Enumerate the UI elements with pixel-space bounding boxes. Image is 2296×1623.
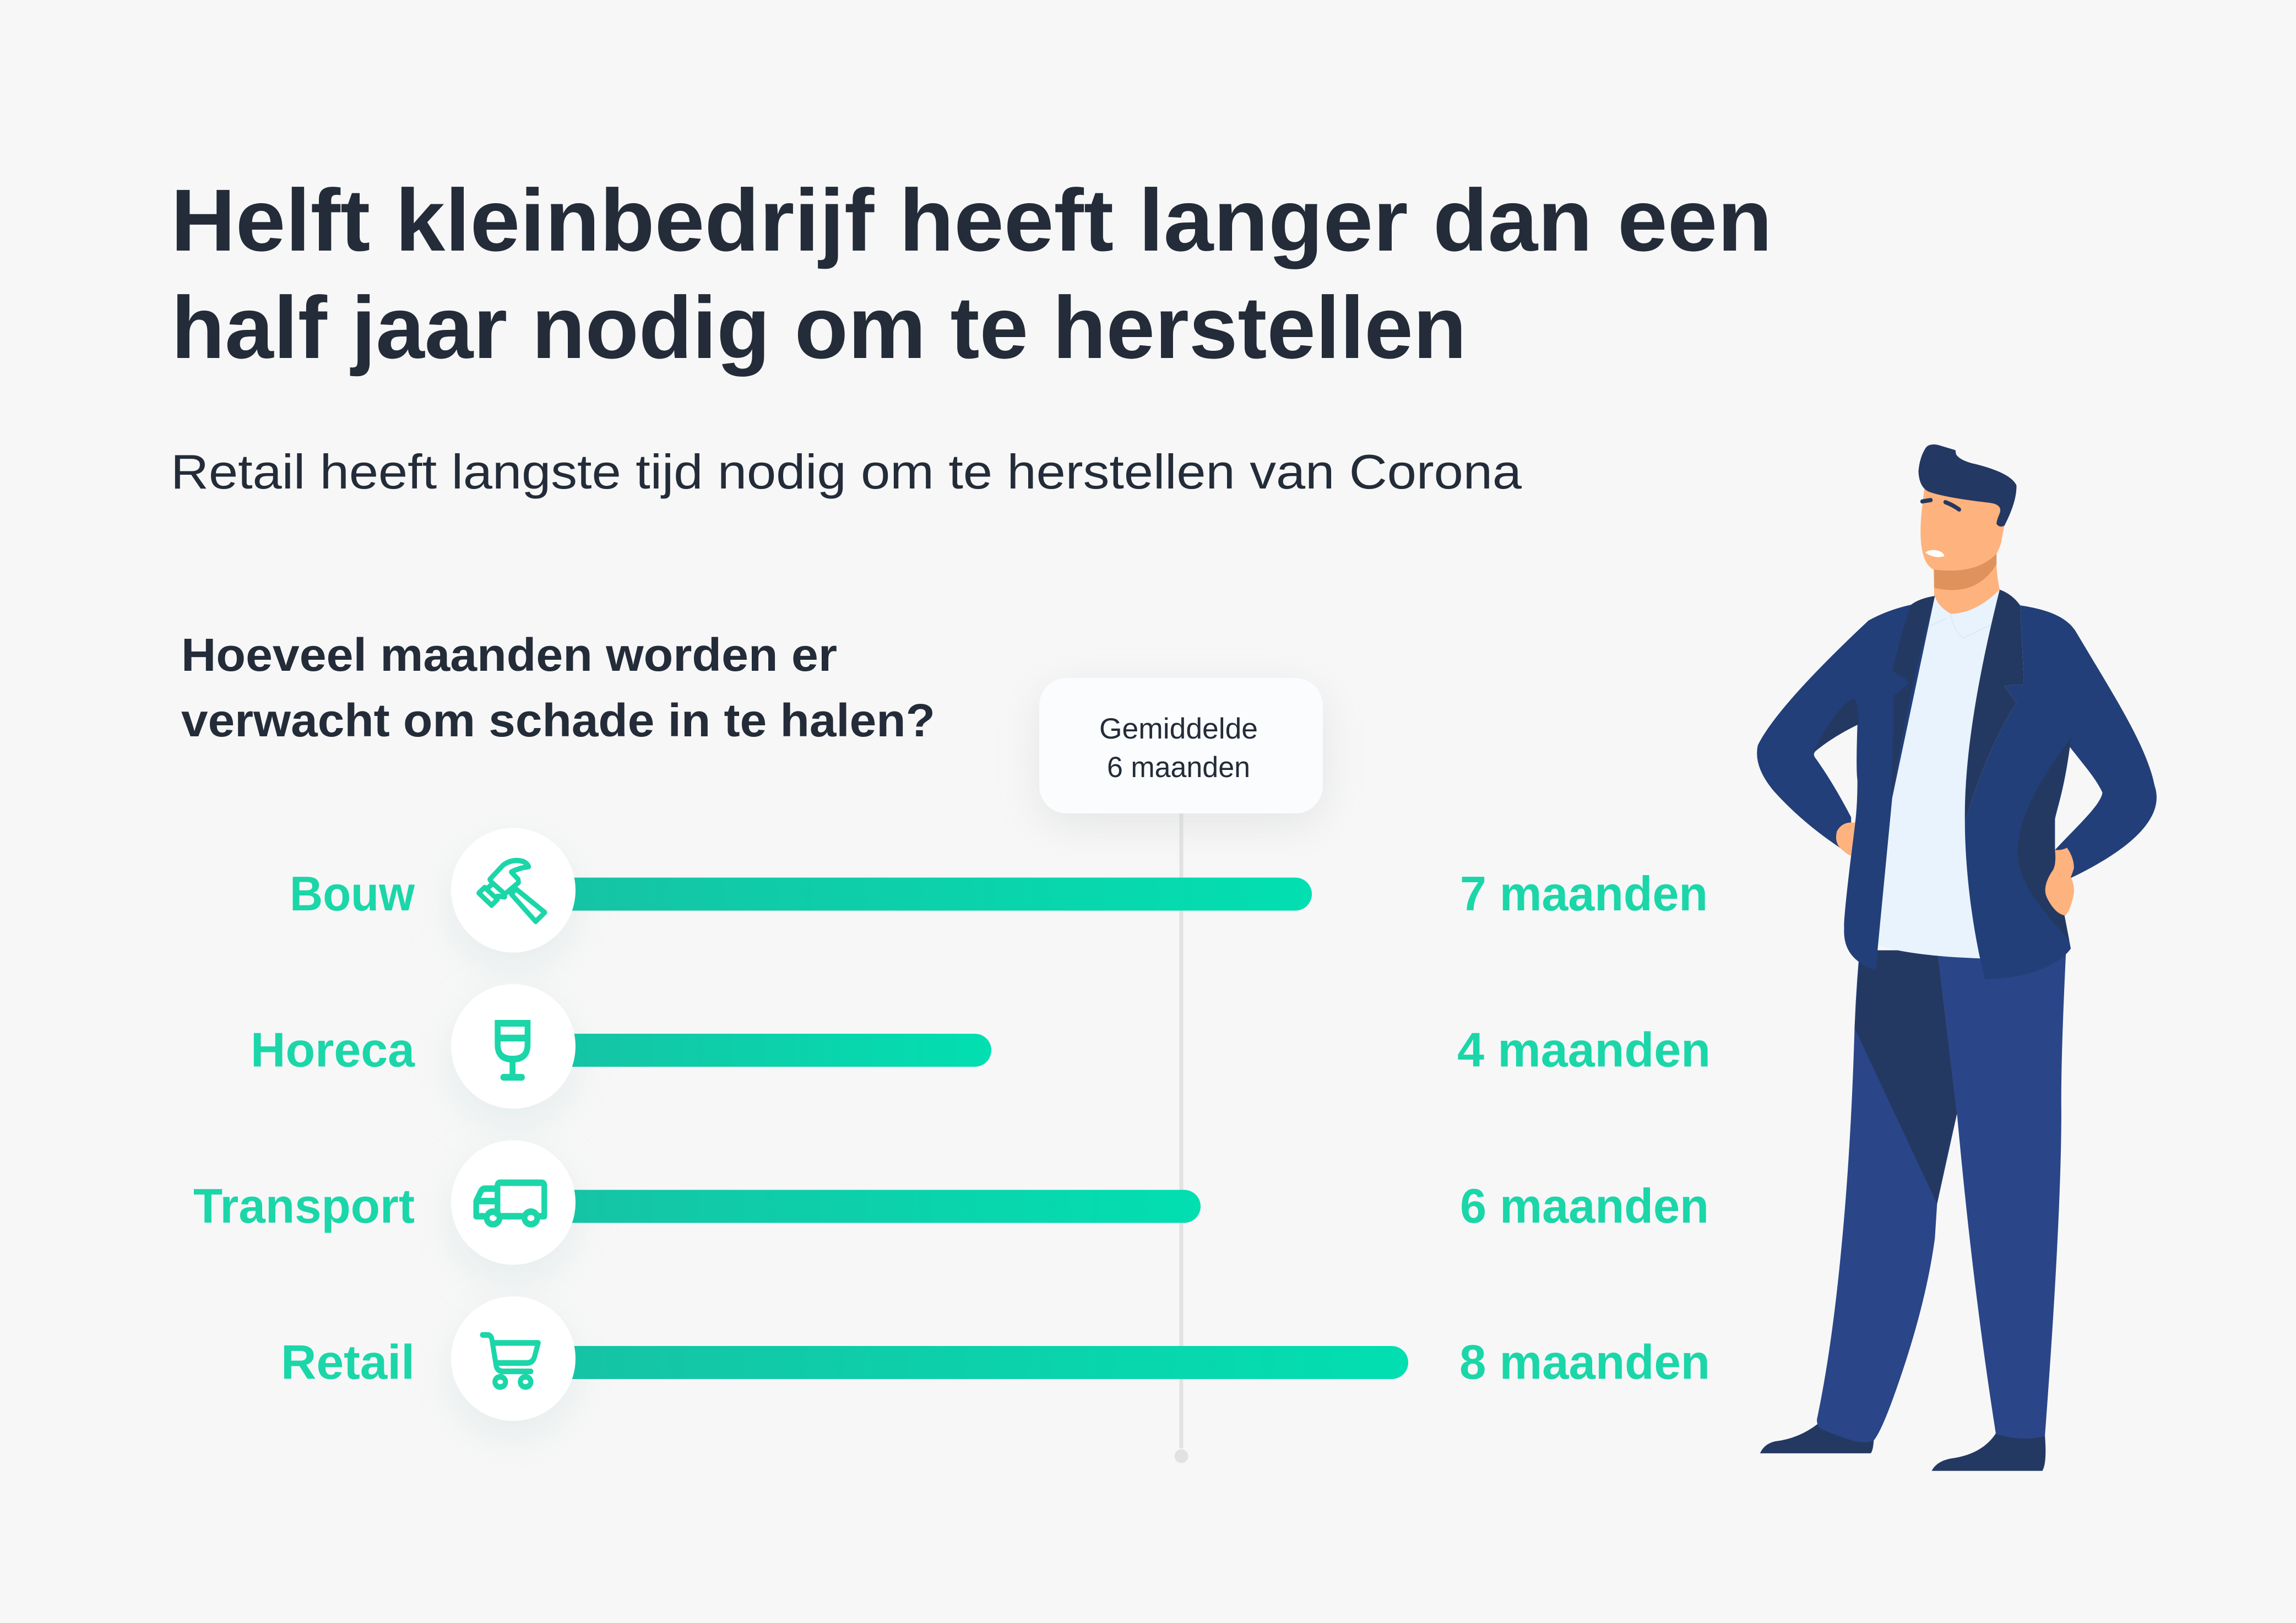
average callout: 6 maanden bbox=[1107, 751, 1250, 784]
title: half jaar nodig om te herstellen bbox=[171, 278, 1467, 377]
title: Helft kleinbedrijf heeft langer dan een bbox=[171, 171, 1772, 269]
row: Retail: Retail bbox=[281, 1335, 415, 1389]
row: Bouw: Bouw bbox=[290, 866, 415, 921]
title bbox=[171, 171, 1772, 377]
row: Horeca: Horeca bbox=[251, 1022, 415, 1077]
row: Horeca: 4 maanden bbox=[1457, 1022, 1711, 1077]
row: Horeca bbox=[251, 984, 1711, 1124]
average callout bbox=[1039, 678, 1323, 824]
average callout: Gemiddelde bbox=[1099, 713, 1258, 745]
chart question heading: verwacht om schade in te halen? bbox=[181, 694, 935, 746]
subtitle: Retail heeft langste tijd nodig om te herstellen van Corona bbox=[171, 444, 1522, 499]
average reference line bbox=[1174, 810, 1188, 1463]
row: Transport bbox=[193, 1140, 1709, 1280]
chart question heading bbox=[181, 629, 935, 746]
row: Retail bbox=[281, 1296, 1710, 1436]
row: Bouw bbox=[290, 828, 1708, 968]
chart question heading: Hoeveel maanden worden er bbox=[181, 629, 837, 681]
row: Transport: Transport bbox=[193, 1179, 415, 1233]
row: Bouw: 7 maanden bbox=[1460, 866, 1708, 921]
row: Transport: 6 maanden bbox=[1460, 1179, 1709, 1233]
row: Retail: 8 maanden bbox=[1459, 1335, 1710, 1389]
illustration: worried businessman bbox=[1757, 444, 2157, 1471]
